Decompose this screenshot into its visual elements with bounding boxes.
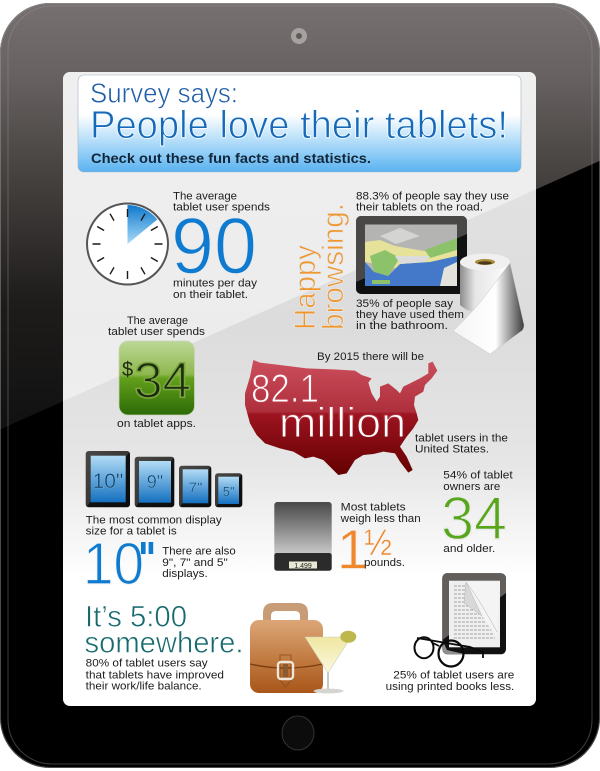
text: work life balance [86,658,224,692]
subheading: Check out these fun facts and statistics. [91,150,371,166]
text: in the bathroom: 35% of people say [356,298,453,310]
icon: kitchen scale [274,502,332,571]
text: by 2015: By 2015 there will be [317,351,424,363]
icon: tablet sizes: 7" [189,480,202,496]
icon: tablet sizes: 9" [147,472,163,492]
heading: people love their tablets: People love their tablets! [90,104,508,147]
icon: toilet roll [453,254,524,354]
stat: weight: weigh less than [340,513,421,525]
stat: apps spend [108,315,205,430]
icon: tablet sizes [86,451,242,507]
stat: apps spend: on tablet apps. [117,418,196,430]
text: printed books [386,669,514,693]
text: on the road [356,190,509,214]
icon: green app tile [119,341,194,415]
heading: five o'clock: It’s 5:00 [85,601,187,634]
screen [63,72,536,706]
heading: five o'clock: somewhere. [84,627,244,660]
stat: apps spend: $ [122,359,133,381]
stat: apps spend: tablet user spends [108,326,205,338]
rotated heading: happy browsing [289,203,350,330]
stat: age: owners are [443,481,500,493]
stat: display size: size for a tablet is [86,526,177,538]
stat: 90 minutes: tablet user spends [173,202,270,214]
stat: apps spend: 34 [134,352,191,408]
stat: age: and older. [443,543,495,555]
stat: 90 minutes: The average [173,190,237,202]
stat: weight: 1 [337,518,368,580]
heading: survey says: Survey says: [90,78,238,108]
stat: weight: pounds. [364,557,405,569]
stat: age: 54% of tablet [443,470,514,482]
text: tablet users: tablet users in the [415,432,508,444]
stat: display size: displays. [162,568,208,580]
text: on the road: 88.3% of people say they use [356,190,509,202]
icon: kitchen scale: 1.499 [294,563,312,570]
stat: 82.1: 82.1 [251,367,319,411]
text: printed books: 25% of tablet users are [393,669,514,681]
icon: glasses [414,637,483,666]
text: on the road: their tablets on the road. [356,202,483,214]
text: work life balance: that tablets have improved [86,669,224,681]
icon: clock [87,204,168,284]
stat: apps spend: The average [127,315,188,327]
stat: 90 minutes: 90 [171,201,257,290]
stat: weight: Most tablets [341,502,406,514]
rotated heading: happy browsing: browsing. [317,203,350,330]
icon: briefcase [250,603,323,693]
icon: e-reader tablet [442,573,506,654]
stat: display size: 10 [83,531,144,597]
text: in the bathroom: in the bathroom. [356,320,448,332]
header banner [78,75,521,172]
icon: tablet with map [356,216,467,294]
icon: tablet sizes: 10" [93,470,123,493]
stat: display size: There are also [162,545,236,557]
stat: display size: 9", 7" and 5" [162,557,228,569]
stat: age: 34 [441,485,507,552]
text: printed books: using printed books less. [386,681,514,693]
heading: five o'clock [84,601,244,660]
stat: million: million [279,399,406,446]
camera lens [291,28,307,44]
text: tablet users [415,432,508,456]
text: work life balance: their work/life balance. [86,680,202,692]
text: work life balance: 80% of tablet users say [86,658,208,670]
map: United States [245,360,437,475]
icon: tablet sizes: 5" [223,484,235,499]
home button [282,716,314,750]
icon: martini [305,631,356,693]
text: tablet users: United States. [415,444,489,456]
stat: 90 minutes: on their tablet. [173,289,248,301]
stat: weight [337,502,421,580]
text: in the bathroom [356,298,464,332]
stat: display size: The most common display [86,514,222,526]
text: in the bathroom: they have used them [356,309,464,321]
stat: 90 minutes: minutes per day [173,278,257,290]
stat: display size [83,514,236,597]
rotated heading: happy browsing: Happy [289,245,322,330]
stat: weight: ½ [364,522,392,563]
